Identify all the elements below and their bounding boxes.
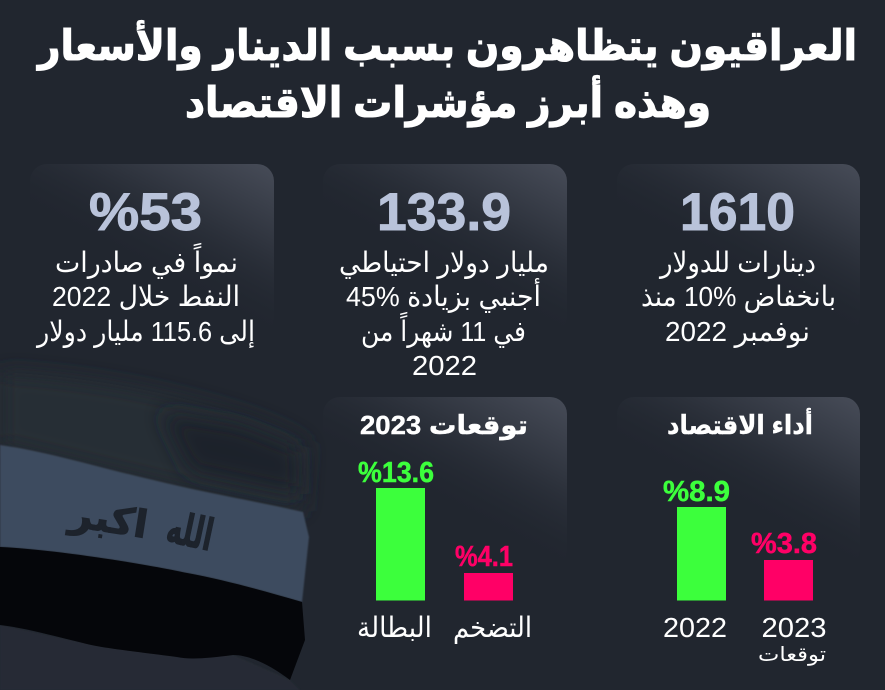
panel: economy performance chart: %8.9 [663, 476, 730, 508]
panel: 2023 forecasts chart: توقعات 2023 [360, 410, 528, 441]
background flag photo: اكبر [65, 493, 151, 547]
panel: economy performance chart [617, 397, 860, 666]
panel: 2023 forecasts chart: %4.1 [455, 541, 513, 573]
title [36, 20, 857, 128]
title: وهذه أبرز مؤشرات الاقتصاد [185, 75, 711, 128]
panel: oil exports: إلى 115.6 مليار دولار [35, 316, 255, 348]
panel: foreign reserves: 133.9 [377, 183, 511, 242]
panel: foreign reserves: 2022 [412, 350, 477, 381]
panel: oil exports [30, 164, 274, 348]
panel: dinar rate: نوفمبر 2022 [665, 316, 810, 348]
panel: oil exports: نمواً في صادرات [55, 242, 238, 279]
panel: foreign reserves: مليار دولار احتياطي [339, 247, 549, 279]
panel: 2023 forecasts chart: %13.6 [358, 457, 434, 489]
panel: economy performance chart: 2023 [762, 612, 826, 643]
panel: dinar rate [617, 164, 860, 348]
panel: oil exports: %53 [89, 183, 202, 242]
panel: economy performance chart: توقعات [758, 644, 826, 666]
background flag photo [0, 372, 309, 690]
panel: foreign reserves: في 11 شهراً من [361, 311, 526, 348]
panel: oil exports: النفط خلال 2022 [52, 281, 240, 312]
panel: foreign reserves [323, 164, 567, 381]
panel: dinar rate: 1610 [680, 183, 795, 242]
panel: economy performance chart: %3.8 [751, 528, 817, 560]
panel: 2023 forecasts chart [323, 397, 567, 644]
panel: dinar rate: دينارات للدولار [658, 247, 816, 279]
panel: dinar rate: بانخفاض %10 منذ [641, 281, 836, 313]
panel: economy performance chart: أداء الاقتصاد [667, 408, 813, 440]
panel: 2023 forecasts chart: البطالة [357, 612, 432, 643]
panel: 2023 forecasts chart: التضخم [453, 612, 532, 644]
background flag photo: الله [162, 503, 218, 561]
panel: foreign reserves: أجنبي بزيادة %45 [346, 277, 541, 313]
panel: economy performance chart: 2022 [663, 612, 727, 643]
